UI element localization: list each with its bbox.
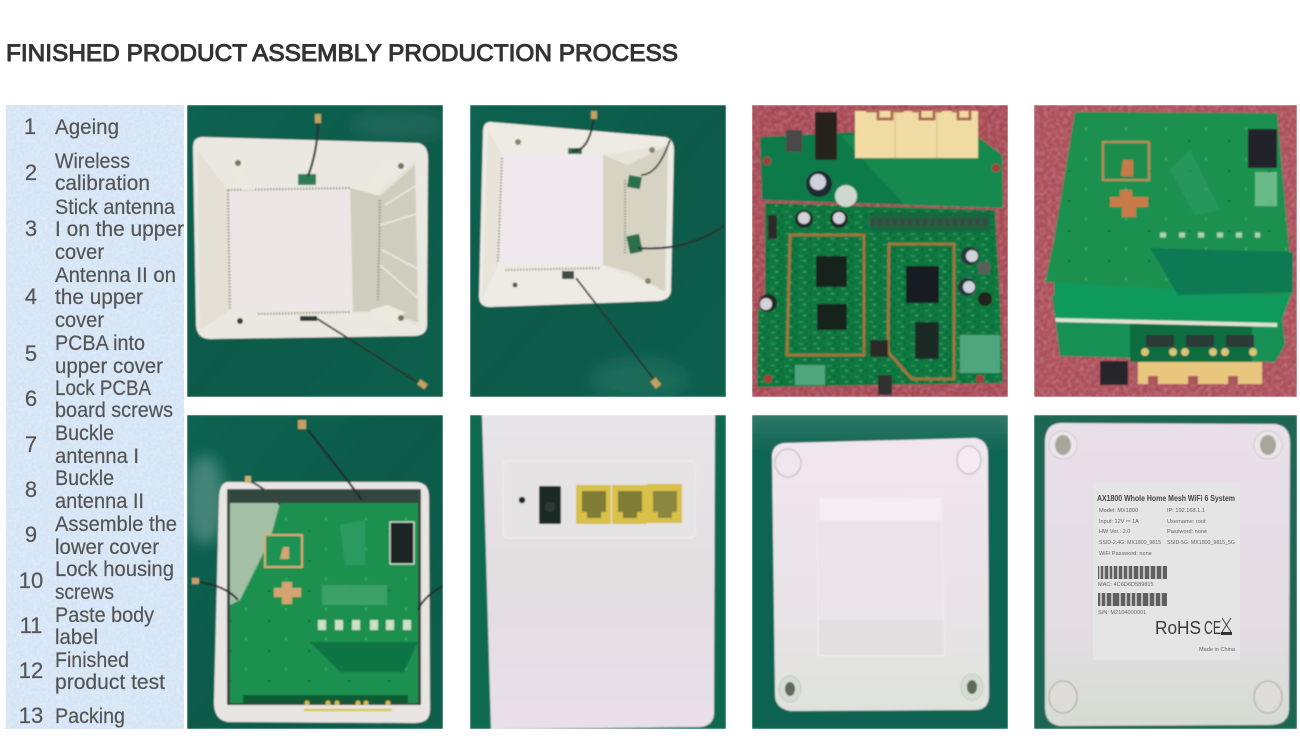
step 8: antenna II [55, 490, 144, 513]
step 3: Stick antenna [55, 196, 175, 219]
step 12 [19, 649, 165, 694]
step 3: cover [55, 241, 104, 264]
step 8 [25, 467, 144, 513]
step 13 [19, 703, 125, 728]
step 13: Packing [55, 705, 125, 728]
product label: Model: MX1800 [1099, 508, 1138, 514]
step 8: 8 [25, 477, 37, 502]
product label: MAC: 4C6D6D589815 [1098, 582, 1154, 588]
step 13: 13 [19, 703, 43, 728]
photo: upper cover with first antenna [187, 105, 450, 397]
product label: RoHS [1155, 618, 1201, 638]
step 11: label [55, 626, 98, 649]
product label: IP: 192.168.1.1 [1167, 508, 1205, 514]
port panel [503, 483, 695, 538]
product label: AX1800 Whole Home Mesh WiFi 6 System [1097, 494, 1235, 503]
step 5: PCBA into [55, 332, 145, 355]
step 5: upper cover [55, 355, 163, 378]
step 7: Buckle [55, 422, 114, 445]
barcode: MAC [1098, 566, 1167, 579]
step 11: Paste body [55, 604, 154, 627]
step 10: Lock housing [55, 558, 174, 581]
step 10: screws [55, 581, 114, 604]
product label: Made in China [1199, 647, 1236, 653]
step 7: 7 [25, 432, 37, 457]
step 9: Assemble the [55, 513, 177, 536]
photo: PCBA in upper cover with antennas [185, 415, 443, 729]
step 10 [19, 558, 174, 604]
title: FINISHED PRODUCT ASSEMBLY PRODUCTION PROCESS [6, 40, 678, 67]
step 6: Lock PCBA [55, 377, 151, 400]
product label: SSID-5G: MX1800_9815_5G [1167, 540, 1235, 546]
step 4: the upper [55, 286, 143, 309]
step 6 [25, 377, 173, 422]
step 4: cover [55, 309, 104, 332]
step 11: 11 [20, 613, 42, 638]
photo: upper cover with all antennas [470, 105, 726, 402]
step 2: 2 [25, 160, 37, 185]
step 4 [25, 264, 176, 332]
step 9: lower cover [55, 536, 159, 559]
panel: process step list [6, 105, 184, 729]
step 6: board screws [55, 399, 173, 422]
photo: lower cover outside [752, 415, 1008, 729]
step 5: 5 [25, 341, 37, 366]
step 6: 6 [25, 386, 37, 411]
step 3: I on the upper [55, 218, 184, 241]
product label: HW Ver.: 2.0 [1099, 529, 1130, 535]
step 9 [25, 513, 177, 559]
step 1: Ageing [55, 116, 119, 139]
step 5 [25, 332, 163, 378]
step 12: product test [55, 671, 165, 694]
step 4: 4 [25, 284, 37, 309]
step 1: 1 [24, 114, 36, 139]
step 12: 12 [19, 658, 43, 683]
product label: WiFi Password: none [1099, 551, 1152, 557]
step 1 [24, 114, 119, 139]
step 7: antenna I [55, 445, 139, 468]
step 12: Finished [55, 649, 129, 672]
step 10: 10 [19, 568, 43, 593]
step 7 [25, 422, 139, 468]
product label: S/N: M2104000001 [1098, 610, 1146, 616]
product label: Password: none [1167, 529, 1207, 535]
photo: assembled unit, port side [470, 415, 726, 729]
step 2: calibration [55, 172, 150, 195]
product label: Input: 12V ⎓ 1A [1099, 519, 1139, 525]
step 4: Antenna II on [55, 264, 176, 287]
product label: SSID-2.4G: MX1800_9815 [1099, 540, 1161, 546]
barcode: serial number [1098, 593, 1167, 606]
photo: body label side [1034, 415, 1297, 729]
step 8: Buckle [55, 467, 114, 490]
step 2: Wireless [55, 150, 130, 173]
photo: PCBA top view [752, 105, 1008, 397]
photo: PCBA bottom view [1034, 105, 1297, 397]
step 3: 3 [25, 216, 37, 241]
step 2 [25, 150, 150, 195]
step 9: 9 [25, 522, 37, 547]
step 11 [20, 604, 154, 649]
product label: Username: root [1167, 519, 1206, 525]
product label [1093, 483, 1240, 660]
step 3 [25, 196, 184, 264]
product label: CE [1204, 618, 1221, 638]
